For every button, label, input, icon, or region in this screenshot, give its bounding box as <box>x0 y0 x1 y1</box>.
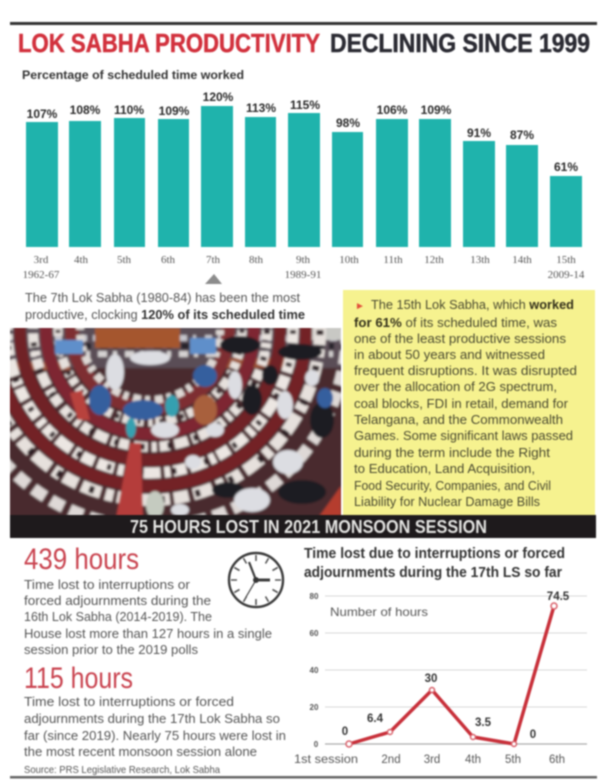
bar chart: percentage of scheduled time worked: 7th <box>206 254 221 266</box>
stat: 439 hours: 439 hours <box>24 543 139 576</box>
stat: 439 hours <box>24 543 272 657</box>
bar chart: percentage of scheduled time worked: 1989-91 <box>285 269 321 281</box>
panel: yellow callout on 15th Lok Sabha: The 15th Lok Sabha, which worked <box>371 297 574 312</box>
bar chart: percentage of scheduled time worked: 4th <box>74 254 89 266</box>
bar chart: percentage of scheduled time worked: 12th <box>424 254 444 266</box>
bar chart: percentage of scheduled time worked: 10th <box>339 254 359 266</box>
bar chart: percentage of scheduled time worked: 106% <box>377 103 408 117</box>
stat: 115 hours <box>24 662 286 759</box>
panel: yellow callout on 15th Lok Sabha: ► <box>355 301 365 312</box>
panel: yellow callout on 15th Lok Sabha: Liability for Nuclear Damage Bills <box>354 494 540 509</box>
bar chart: percentage of scheduled time worked: 87% <box>510 128 534 142</box>
bar chart: percentage of scheduled time worked: 98% <box>336 116 360 130</box>
stat: 115 hours: adjournments during the 17th Lok Sabha so <box>24 711 280 726</box>
bar chart: percentage of scheduled time worked: 107% <box>27 107 58 121</box>
line chart: hours lost per session: 0 <box>314 740 319 749</box>
bar chart: percentage of scheduled time worked: 91% <box>467 126 491 140</box>
section banner: 75 HOURS LOST IN 2021 MONSOON SESSION <box>130 517 487 537</box>
bar chart: percentage of scheduled time worked: 8th <box>249 254 264 266</box>
bar chart: percentage of scheduled time worked: 9th <box>296 254 311 266</box>
line chart: hours lost per session: 40 <box>310 666 319 675</box>
line chart: hours lost per session: 6th <box>549 754 565 766</box>
panel: yellow callout on 15th Lok Sabha: for 61% of its scheduled time, was <box>354 315 557 330</box>
panel: yellow callout on 15th Lok Sabha <box>343 290 595 516</box>
chart heading: Time lost due to interruptions or forced <box>304 545 565 562</box>
bar chart: percentage of scheduled time worked: 109% <box>159 104 190 118</box>
bar chart: percentage of scheduled time worked: 109% <box>421 103 452 117</box>
note: 7th Lok Sabha: The 7th Lok Sabha (1980-84) has been the most <box>25 290 300 305</box>
line chart: hours lost per session: 0 <box>530 729 536 741</box>
title <box>18 28 590 58</box>
chart subtitle: Percentage of scheduled time worked <box>22 70 244 82</box>
line chart: hours lost per session: 5th <box>505 754 521 766</box>
stat: 115 hours: far (since 2019). Nearly 75 hours were lost in <box>24 728 286 743</box>
stat: 115 hours: Time lost to interruptions or forced <box>24 694 234 709</box>
bar chart: percentage of scheduled time worked: 1962-67 <box>23 269 60 281</box>
panel: yellow callout on 15th Lok Sabha: in about 50 years and witnessed <box>354 347 545 362</box>
stat: 439 hours: 16th Lok Sabha (2014-2019). The <box>24 609 212 624</box>
panel: yellow callout on 15th Lok Sabha: Games. Some significant laws passed <box>354 428 573 443</box>
bar chart: percentage of scheduled time worked: 6th <box>161 254 176 266</box>
chart heading <box>304 545 565 581</box>
line chart: hours lost per session: 20 <box>310 703 319 712</box>
bar chart: percentage of scheduled time worked: 61% <box>554 160 578 174</box>
line chart: hours lost per session: 80 <box>310 592 319 601</box>
line chart: hours lost per session: 2nd <box>381 754 401 766</box>
chart heading: adjournments during the 17th LS so far <box>304 564 562 581</box>
line chart: hours lost per session: 60 <box>310 629 319 638</box>
source: Source: PRS Legislative Research, Lok Sabha <box>24 764 220 776</box>
stat: 439 hours: Time lost to interruptions or <box>24 577 191 592</box>
line chart: hours lost per session: 3rd <box>424 754 440 766</box>
bar chart: percentage of scheduled time worked: 108% <box>70 103 101 117</box>
bar chart: percentage of scheduled time worked: 15th <box>556 254 576 266</box>
bar chart: percentage of scheduled time worked: 115% <box>290 98 320 112</box>
line chart: hours lost per session: 4th <box>465 754 481 766</box>
icon: clock <box>229 553 283 607</box>
line chart: hours lost per session: 3.5 <box>475 717 492 729</box>
panel: yellow callout on 15th Lok Sabha: frequent disruptions. It was disrupted <box>354 363 577 378</box>
bar chart: percentage of scheduled time worked: 120% <box>203 90 234 104</box>
line chart: hours lost per session: 6.4 <box>367 713 384 725</box>
stat: 439 hours: House lost more than 127 hours in a single <box>24 626 272 641</box>
stat: 439 hours: session prior to the 2019 polls <box>24 642 198 657</box>
section banner <box>10 515 596 538</box>
panel: yellow callout on 15th Lok Sabha: Telangana, and the Commonwealth <box>354 412 563 427</box>
line chart: hours lost per session: 0 <box>342 726 348 738</box>
note: 7th Lok Sabha: productive, clocking 120% of its scheduled time <box>25 307 305 322</box>
title: LOK SABHA PRODUCTIVITY <box>18 28 320 58</box>
panel: yellow callout on 15th Lok Sabha: during the term include the Right <box>354 445 550 460</box>
bar chart: percentage of scheduled time worked: 113% <box>246 101 276 115</box>
bar chart: percentage of scheduled time worked: 5th <box>117 254 132 266</box>
bar chart: percentage of scheduled time worked: 3rd <box>34 254 49 266</box>
bar chart: percentage of scheduled time worked: 11th <box>383 254 403 266</box>
line chart: hours lost per session: 30 <box>425 673 437 685</box>
line chart: hours lost per session: 74.5 <box>547 591 570 603</box>
bar chart: percentage of scheduled time worked: 2009-14 <box>548 269 585 281</box>
bar chart: percentage of scheduled time worked <box>23 90 585 281</box>
bar chart: percentage of scheduled time worked: 14th <box>512 254 532 266</box>
bar chart: percentage of scheduled time worked: 110% <box>114 103 144 117</box>
panel: parliament chamber photo <box>9 327 342 516</box>
note: 7th Lok Sabha <box>25 290 305 322</box>
panel: yellow callout on 15th Lok Sabha: coal blocks, FDI in retail, demand for <box>354 396 569 411</box>
panel: yellow callout on 15th Lok Sabha: one of the least productive sessions <box>354 331 567 346</box>
panel: yellow callout on 15th Lok Sabha: to Education, Land Acquisition, <box>354 461 535 476</box>
stat: 115 hours: 115 hours <box>24 662 133 695</box>
bar chart: percentage of scheduled time worked: 13th <box>470 254 490 266</box>
icon: pointer triangle <box>205 274 222 284</box>
stat: 439 hours: forced adjournments during the <box>24 593 211 608</box>
line chart: hours lost per session: Number of hours <box>330 605 428 619</box>
stat: 115 hours: the most recent monsoon session alone <box>24 744 257 759</box>
panel: yellow callout on 15th Lok Sabha: Food Security, Companies, and Civil <box>354 478 551 493</box>
line chart: hours lost per session <box>294 591 587 766</box>
line chart: hours lost per session: 1st session <box>294 754 358 766</box>
panel: yellow callout on 15th Lok Sabha: over the allocation of 2G spectrum, <box>354 379 557 394</box>
